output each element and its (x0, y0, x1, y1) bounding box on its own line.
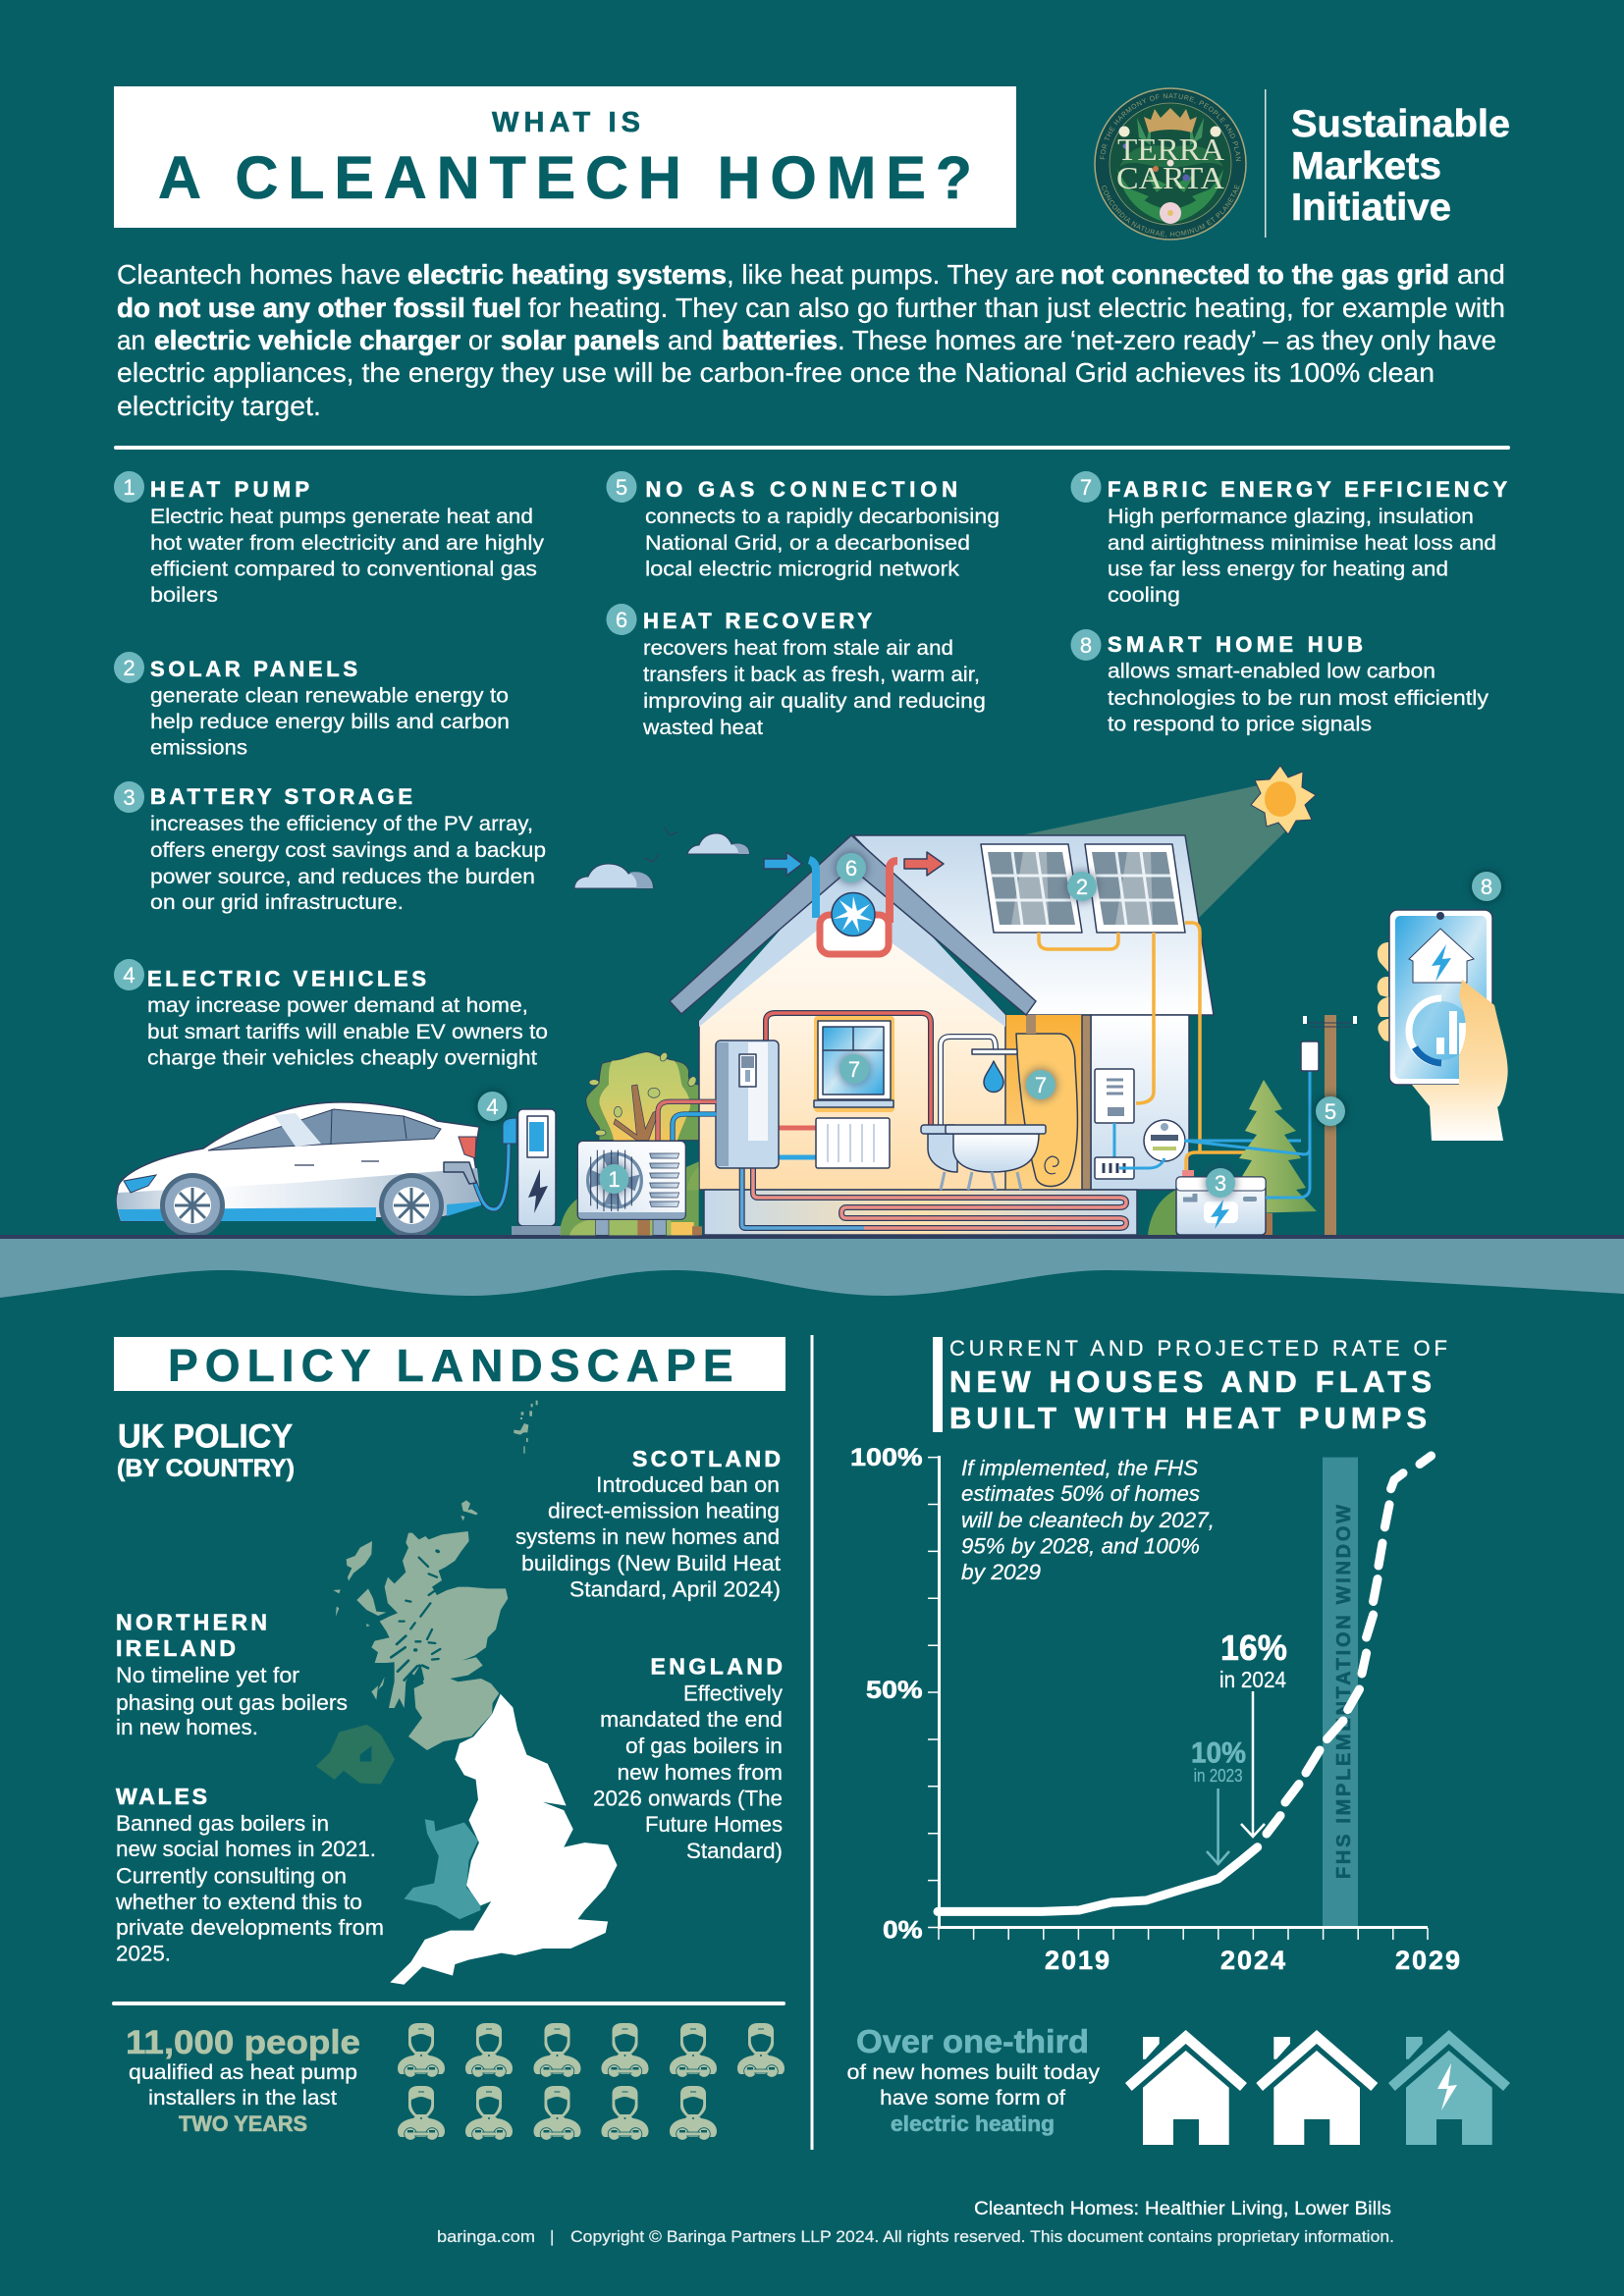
UK policy heading: UK POLICY (118, 1417, 293, 1455)
Scotland policy text: systems in new homes and (515, 1524, 780, 1549)
intro paragraph: . These homes are ‘net-zero ready’ – as they only have (838, 325, 1496, 355)
boiler (716, 1041, 779, 1168)
underfloor heating pipes (742, 1168, 1126, 1228)
intro paragraph: and (668, 325, 713, 355)
item 4: electric vehicles: but smart tariffs will enable EV owners to (147, 1021, 548, 1043)
item 2: solar panels: SOLAR PANELS (150, 657, 357, 681)
item 6: heat recovery: recovers heat from stale air and (643, 637, 953, 660)
Wales policy text: private developments from (116, 1915, 384, 1940)
item 2: solar panels: generate clean renewable energy to (150, 685, 509, 707)
UK policy heading: (BY COUNTRY) (117, 1455, 295, 1482)
logo crown (1144, 108, 1197, 133)
badge 3 (1204, 1166, 1237, 1200)
item 8: smart home hub: allows smart-enabled low carbon (1108, 661, 1435, 683)
FHS implementation window: FHS IMPLEMENTATION WINDOW (1333, 1505, 1355, 1879)
footer copyright: Copyright © Baringa Partners LLP 2024. All rights reserved. This document contains proprietary information. (570, 2227, 1394, 2246)
axis labels: 2029 (1395, 1946, 1460, 1975)
item 8: smart home hub (1070, 629, 1489, 736)
logo: Terra Carta seal: CARTA (1116, 160, 1224, 195)
Scotland policy text (515, 1446, 781, 1602)
item 7: fabric energy efficiency: cooling (1108, 584, 1180, 607)
illustration: sun beam (1021, 785, 1301, 918)
underfloor slab (704, 1190, 1137, 1235)
Northern Ireland policy text: phasing out gas boilers (116, 1690, 348, 1715)
item 5: no gas connection: National Grid, or a decarbonised (645, 532, 970, 555)
badge 6: 6 (845, 856, 857, 881)
illustration: left tree, bush and heat pump (560, 1051, 716, 1235)
England policy text (593, 1653, 783, 1863)
item 6: heat recovery: transfers it back as fresh, warm air, (643, 664, 980, 686)
Northern Ireland policy text: NORTHERN (116, 1610, 267, 1635)
England policy text: Future Homes (645, 1812, 783, 1837)
badge 2 (1065, 870, 1099, 903)
Wales policy text: new social homes in 2021. (116, 1837, 376, 1861)
badge 1 (597, 1162, 630, 1196)
illustration: EV charger (444, 1109, 561, 1235)
England policy text: of gas boilers in (625, 1734, 783, 1758)
stat: 11,000 people (126, 2024, 360, 2136)
icon: clouds and birds (574, 827, 749, 888)
item 5: no gas connection (607, 471, 1000, 581)
item 7: fabric energy efficiency: FABRIC ENERGY EFFICIENCY (1108, 477, 1507, 502)
Wales policy text: Banned gas boilers in (116, 1811, 329, 1836)
item 5: no gas connection: connects to a rapidly decarbonising (645, 506, 1000, 528)
map: Wales (404, 1819, 480, 1919)
badge 4: 4 (486, 1095, 499, 1119)
stat: 11,000 people: TWO YEARS (179, 2111, 307, 2136)
item 5: no gas connection: 5 (616, 475, 627, 500)
intro paragraph: or (468, 325, 492, 355)
item 3: battery storage: on our grid infrastructure. (150, 891, 404, 914)
x axis (938, 1928, 1428, 1940)
badge 7 insulation: 7 (1035, 1073, 1047, 1097)
UK map (316, 1401, 618, 1985)
England policy text: Standard) (686, 1839, 783, 1863)
Wales policy text: 2025. (116, 1942, 171, 1965)
intro paragraph: electric appliances, the energy they use will be carbon-free once the National Grid achieves its 100% clean (117, 357, 1435, 388)
item 1: heat pump: 1 (123, 475, 135, 500)
logo: Terra Carta seal: TERRA (1117, 132, 1224, 167)
illustration: utility pole (1184, 1015, 1357, 1235)
intro paragraph: Cleantech homes have (117, 259, 401, 290)
logo: Sustainable Markets Initiative: Initiative (1291, 187, 1451, 229)
logo: Sustainable Markets Initiative (1291, 103, 1510, 229)
boiler feed pipes (658, 1101, 716, 1141)
callout: 16% in 2024 (1219, 1628, 1287, 1837)
item 3: battery storage: increases the efficiency of the PV array, (150, 813, 533, 835)
item 7: fabric energy efficiency (1070, 471, 1507, 607)
stat: 11,000 people: 11,000 people (126, 2024, 360, 2061)
Northern Ireland policy text: IRELAND (116, 1635, 236, 1661)
Wales policy text: WALES (116, 1784, 207, 1809)
title banner: A CLEANTECH HOME? (158, 144, 972, 211)
Wales policy text (115, 1784, 384, 1965)
footer copyright: baringa.com (437, 2227, 535, 2246)
item 7: fabric energy efficiency: High performance glazing, insulation (1108, 506, 1474, 528)
item 1: heat pump: boilers (150, 584, 218, 607)
illustration: battery wires (1119, 1141, 1301, 1178)
axis labels: 50% (866, 1677, 923, 1704)
tree trunk (614, 1085, 660, 1141)
badge 7 window (838, 1052, 871, 1086)
line chart (850, 1444, 1460, 1975)
badge 6 (835, 851, 868, 884)
intro paragraph: do not use any other fossil fuel (117, 293, 521, 323)
projected dashed line (1267, 1456, 1432, 1834)
illustration: smartphone in hand (1378, 910, 1508, 1141)
illustration: car (117, 1102, 481, 1238)
heating pipes (766, 1013, 931, 1157)
England policy text: 2026 onwards (The (593, 1787, 783, 1810)
logo foliage (1117, 118, 1223, 224)
bath and shower (921, 1037, 1046, 1190)
Scotland policy text: Introduced ban on (596, 1472, 780, 1497)
item 2: solar panels: emissions (150, 737, 247, 760)
badge 2: 2 (1076, 875, 1088, 899)
item 1: heat pump: Electric heat pumps generate heat and (150, 506, 533, 528)
vent fan and ducts (764, 852, 944, 954)
badge 5 (1314, 1095, 1347, 1128)
map: Scotland (333, 1401, 538, 1750)
mainland (371, 1531, 508, 1750)
item 1: heat pump (114, 471, 545, 607)
Scotland policy text: SCOTLAND (632, 1446, 781, 1471)
logo: Terra Carta seal: CONCORDIA NATURAE, HOMINUM ET PLANETAE (1102, 185, 1239, 238)
logo: Sustainable Markets Initiative: Sustainable (1291, 103, 1510, 145)
item 1: heat pump: efficient compared to conventional gas (150, 558, 537, 581)
heat pump body (577, 1141, 685, 1219)
UK policy heading (117, 1417, 295, 1482)
Shetland (514, 1401, 538, 1454)
tree leaves (589, 1051, 698, 1136)
item 8: smart home hub: to respond to price signals (1108, 713, 1372, 736)
intro paragraph: not connected to the gas grid (1060, 259, 1449, 290)
radiator (816, 1118, 890, 1168)
battery body (1176, 1177, 1266, 1235)
England policy text: ENGLAND (650, 1653, 783, 1679)
item 5: no gas connection: local electric microgrid network (645, 558, 960, 581)
chart title: BUILT WITH HEAT PUMPS (949, 1401, 1427, 1435)
callout: 10% in 2023: in 2023 (1194, 1766, 1243, 1786)
item 7: fabric energy efficiency: and airtightness minimise heat loss and (1108, 532, 1496, 555)
logo: Sustainable Markets Initiative: Markets (1291, 145, 1441, 187)
house side roof plane (853, 835, 1214, 1015)
intro paragraph: electric vehicle charger (154, 325, 460, 355)
axis labels: 0% (883, 1916, 923, 1944)
intro paragraph: electric heating systems (407, 259, 727, 290)
badge 5: 5 (1325, 1099, 1336, 1124)
title banner (114, 86, 1016, 228)
intro paragraph (117, 259, 1505, 421)
callout: FHS note: by 2029 (961, 1560, 1041, 1584)
badge 3: 3 (1215, 1171, 1226, 1196)
item 6: heat recovery: 6 (616, 608, 627, 632)
stat: 11,000 people: installers in the last (148, 2087, 337, 2109)
item 7: fabric energy efficiency: 7 (1080, 475, 1092, 500)
chart title: CURRENT AND PROJECTED RATE OF (949, 1336, 1447, 1361)
icons: houses (1125, 2030, 1510, 2145)
callout: 16% in 2024: in 2024 (1219, 1667, 1286, 1692)
item 3: battery storage: offers energy cost savings and a backup (150, 839, 546, 862)
badge 7 insulation (1024, 1068, 1057, 1101)
Northern Ireland policy text: in new homes. (116, 1715, 258, 1739)
stat: over one-third: Over one-third (856, 2023, 1089, 2059)
car wheels (160, 1173, 444, 1238)
insulation cavity (1005, 1015, 1091, 1190)
actual line (938, 1847, 1258, 1911)
intro paragraph: solar panels (501, 325, 660, 355)
bush below heat pump (560, 1161, 699, 1235)
stat: 11,000 people: qualified as heat pump (129, 2061, 357, 2084)
item 3: battery storage: BATTERY STORAGE (150, 784, 412, 809)
axis labels (850, 1444, 1460, 1975)
item 4: electric vehicles: may increase power demand at home, (147, 994, 528, 1017)
callout: FHS note: estimates 50% of homes (961, 1481, 1200, 1506)
house side wall (1091, 1015, 1189, 1190)
Scotland policy text: Standard, April 2024) (569, 1576, 781, 1602)
item 4: electric vehicles: ELECTRIC VEHICLES (147, 966, 426, 991)
intro paragraph: , like heat pumps. They are (727, 259, 1055, 290)
gable shading (699, 850, 1005, 1027)
item 3: battery storage (114, 781, 546, 914)
item 8: smart home hub: 8 (1080, 633, 1092, 658)
stat: over one-third (846, 2023, 1101, 2136)
axis labels: 2024 (1220, 1946, 1285, 1975)
divider in logo lockup (1265, 89, 1267, 238)
item 2: solar panels: help reduce energy bills and carbon (150, 711, 510, 733)
intro paragraph: electricity target. (117, 391, 321, 421)
number badges on illustration (475, 851, 1503, 1200)
England policy text: mandated the end (600, 1707, 783, 1732)
Orkney (460, 1500, 478, 1521)
item 1: heat pump: hot water from electricity and are highly (150, 532, 545, 555)
map: Northern Ireland (316, 1725, 395, 1784)
Northern Ireland policy text: No timeline yet for (116, 1663, 299, 1687)
badge 4 (475, 1090, 509, 1123)
chart title: NEW HOUSES AND FLATS (949, 1364, 1432, 1399)
consumer unit and meter (1095, 923, 1200, 1179)
illustration: right tree (1148, 1080, 1317, 1235)
callout: 10% in 2023: 10% (1191, 1737, 1246, 1769)
axis labels: 2019 (1045, 1946, 1110, 1975)
item 2: solar panels (114, 652, 510, 760)
item 7: fabric energy efficiency: use far less energy for heating and (1108, 558, 1448, 581)
item 4: electric vehicles (114, 959, 548, 1070)
item 6: heat recovery: improving air quality and reducing (643, 690, 986, 713)
badge 7 window: 7 (848, 1057, 860, 1082)
stat: over one-third: of new homes built today (846, 2061, 1101, 2084)
item 6: heat recovery: wasted heat (642, 717, 763, 739)
window (814, 1016, 894, 1112)
Scotland policy text: buildings (New Build Heat (521, 1551, 781, 1575)
heat pump legs (596, 1219, 666, 1235)
roof gable edge (670, 835, 1036, 1015)
FHS implementation window (1323, 1458, 1358, 1928)
tree foliage (586, 1052, 699, 1141)
map: England (390, 1694, 618, 1985)
badge 1: 1 (608, 1167, 621, 1192)
policy landscape heading: POLICY LANDSCAPE (168, 1340, 732, 1391)
callout: FHS note (961, 1456, 1215, 1584)
icons: installers (398, 2023, 785, 2140)
item 5: no gas connection: NO GAS CONNECTION (646, 477, 957, 502)
Wales policy text: whether to extend this to (115, 1890, 362, 1914)
intro paragraph: for heating. They can also go further than just electric heating, for example with (528, 293, 1505, 323)
item 2: solar panels: 2 (123, 656, 135, 680)
Hebrides and Skye (333, 1541, 386, 1700)
intro paragraph: and (1457, 259, 1505, 290)
ground band (0, 1235, 1624, 1298)
badge 8: 8 (1481, 875, 1492, 899)
England policy text: Effectively (683, 1682, 783, 1706)
intro paragraph: batteries (722, 325, 838, 355)
item 3: battery storage: power source, and reduces the burden (150, 866, 535, 888)
lochs (391, 1551, 440, 1681)
callout: 10% in 2023 (1191, 1737, 1246, 1864)
item 3: battery storage: 3 (123, 785, 135, 810)
England policy text: new homes from (617, 1760, 783, 1785)
item 4: electric vehicles: charge their vehicles cheaply overnight (147, 1046, 537, 1070)
title banner: WHAT IS (492, 107, 640, 138)
house icon 2 (1256, 2030, 1378, 2145)
item 8: smart home hub: technologies to be run most efficiently (1108, 687, 1489, 710)
footer tagline: Cleantech Homes: Healthier Living, Lower Bills (974, 2199, 1391, 2219)
chart title (933, 1336, 1447, 1435)
intro paragraph: an (117, 325, 145, 355)
logo: Terra Carta seal (1094, 87, 1247, 240)
callout: FHS note: If implemented, the FHS (961, 1456, 1198, 1480)
Scotland policy text: direct-emission heating (548, 1499, 780, 1523)
item 8: smart home hub: SMART HOME HUB (1108, 632, 1363, 657)
Northern Ireland policy text (116, 1610, 348, 1739)
footer copyright: | (550, 2227, 554, 2246)
callout: 16% in 2024: 16% (1220, 1628, 1287, 1668)
item 6: heat recovery (607, 604, 986, 739)
callout: FHS note: 95% by 2028, and 100% (961, 1533, 1200, 1559)
illustration: house (670, 835, 1214, 1235)
stat: over one-third: have some form of (880, 2087, 1065, 2109)
vertical divider (811, 1335, 813, 2150)
badge 8 (1470, 870, 1503, 903)
axis labels: 100% (850, 1444, 923, 1471)
Wales policy text: Currently consulting on (116, 1863, 347, 1889)
icon: sun (1251, 766, 1316, 834)
y axis (928, 1456, 939, 1929)
item 1: heat pump: HEAT PUMP (150, 477, 309, 502)
house icon 1 (1125, 2030, 1247, 2145)
house front wall (699, 854, 1005, 1190)
house icon 3: electric (1388, 2030, 1510, 2145)
callout: FHS note: will be cleantech by 2027, (961, 1508, 1215, 1532)
solar panels (981, 844, 1185, 949)
item 4: electric vehicles: 4 (123, 963, 135, 988)
stat: over one-third: electric heating (891, 2111, 1055, 2136)
item 6: heat recovery: HEAT RECOVERY (643, 609, 872, 633)
